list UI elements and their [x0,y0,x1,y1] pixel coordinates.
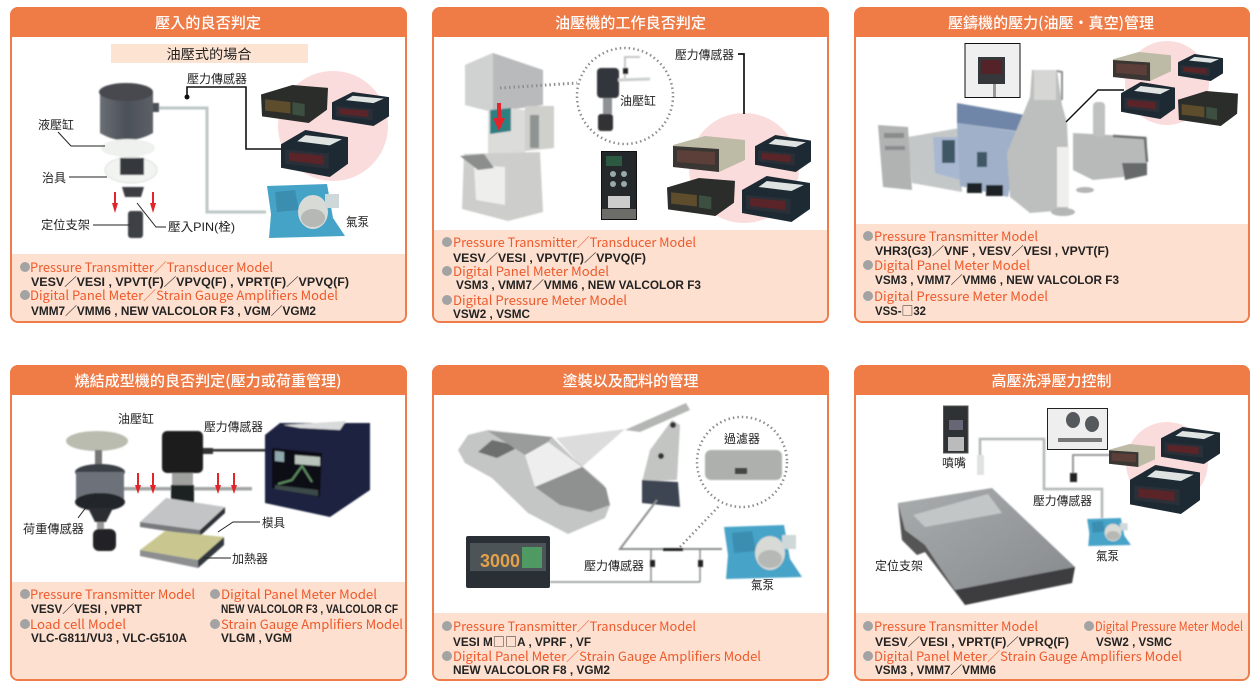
panel 2 diagram [460,47,811,223]
panel 1 header [10,7,407,37]
panel 1 diagram: 定位支架 [41,217,90,232]
inset pressure meter [965,44,1020,98]
die casting machine [878,70,1147,216]
panel 4 diagram: 模具 [262,516,285,530]
panel 1 model list: VESV／VESI , VPVT(F)／VPVQ(F) , VPRT(F)／VPVQ(F) [31,276,349,289]
panel 1 model list: VMM7／VMM6 , NEW VALCOLOR F3 , VGM／VGM2 [31,305,316,318]
panel 5 model list: Pressure Transmitter／Transducer Model [453,616,696,635]
panel 4 diagram: 油壓缸 [118,411,154,426]
panel 1 diagram: 壓力傳感器 [187,71,247,86]
red arrows [135,473,237,494]
panel 6 header: 高壓洗淨壓力控制 [992,370,1112,391]
panel 4 diagram: 加熱器 [232,552,268,566]
panel 6 model list: Pressure Transmitter Model [874,616,1038,635]
panel 2 diagram: 壓力傳感器 [675,47,734,62]
panel 5 model list: NEW VALCOLOR F8 , VGM2 [453,665,610,677]
panel 5 header [432,365,829,395]
panel 4 model list: Digital Panel Meter Model [221,584,377,603]
load cell assembly [66,431,128,551]
panel 5 header: 塗裝以及配料的管理 [562,370,698,391]
tray [898,488,1075,605]
panel 4 header: 燒結成型機的良否判定(壓力或荷重管理) [74,370,342,391]
panel 1 model list [12,254,405,321]
panel 1 model list: Digital Panel Meter／Strain Gauge Amplifiers Model [30,285,338,304]
panel 2 header [432,7,829,37]
panel 5 model list [434,613,827,679]
panel 2 model list: VESV／VESI , VPVT(F)／VPVQ(F) [453,252,646,265]
panel 2 model list: Pressure Transmitter／Transducer Model [453,232,696,251]
magnifier with filter [680,417,787,547]
panel 1 diagram: 治具 [42,171,66,185]
panel: sintering press quality judgement [10,365,407,680]
panel 4 model list: Strain Gauge Amplifiers Model [221,614,403,633]
panel 2 model list: VSW2 , VSMC [453,309,530,321]
panel 1 subtitle: 油壓式的場合 [166,47,252,62]
panel 2 model list: Digital Panel Meter Model [453,261,609,280]
nozzle control box [944,406,968,453]
panel 6 diagram: 氣泵 [1096,549,1119,563]
panel 3 diagram [878,41,1238,216]
panel 2 model list [434,230,827,321]
panel 2 header: 油壓機的工作良否判定 [555,12,706,33]
mould plates [140,498,225,568]
panel 5 diagram: 氣泵 [751,578,774,592]
panel 1 model list: Pressure Transmitter／Transducer Model [30,257,273,276]
spray cone [556,429,625,467]
panel 2 model list: VSM3 , VMM7／VMM6 , NEW VALCOLOR F3 [456,279,701,292]
panel 6 diagram: 定位支架 [875,558,923,573]
panel 4 header [10,365,407,395]
hydraulic cylinder [162,431,265,517]
panel 5 diagram: 過濾器 [724,431,760,446]
panel 6 model list: VSM3 , VMM7／VMM6 [875,664,996,677]
panel 4 diagram [23,411,370,568]
panel 4 model list: VLGM , VGM [221,633,292,645]
panel 3 header [854,7,1250,37]
pump [267,184,345,238]
panel 1 subtitle [111,44,308,63]
red arrow [493,103,505,131]
panel 3 model list: Digital Pressure Meter Model [874,286,1048,305]
panel 4 model list: Pressure Transmitter Model [30,584,195,603]
pump [724,525,802,579]
panel 4 model list: NEW VALCOLOR F3 , VALCOLOR CF [221,604,398,616]
panel 6 model list: Digital Panel Meter／Strain Gauge Amplifiers Model [874,646,1182,665]
panel 4 model list: VLC-G811/VU3 , VLC-G510A [31,633,187,645]
panel 1 diagram: 液壓缸 [38,117,74,132]
inset sensors [1048,408,1108,450]
panel 3 model list: Pressure Transmitter Model [874,226,1038,245]
panel: die casting pressure management [854,7,1250,322]
panel 2 diagram: 油壓缸 [620,93,656,108]
panel 6 diagram: 壓力傳感器 [1033,493,1092,508]
meters [261,85,389,177]
panel 5 diagram: 壓力傳感器 [584,558,644,573]
panel 4 model list [12,582,405,679]
meters [1113,52,1238,126]
panel 3 model list [856,224,1248,321]
panel 3 header: 壓鑄機的壓力(油壓・真空)管理 [948,12,1154,33]
panel: press-fit quality judgement [10,7,407,322]
red arrows [112,192,156,213]
panel 3 model list: VHR3(G3)／VNF , VESV／VESI , VPVT(F) [875,245,1109,258]
digital meter: 3000 [480,551,520,571]
panel 1 diagram: 氣泵 [346,215,369,229]
panel 6 model list: VESV／VESI , VPRT(F)／VPRQ(F) [875,636,1069,649]
panel 1 header: 壓入的良否判定 [155,12,261,33]
pump [1087,518,1131,546]
panel 5 diagram [458,403,802,592]
panel 4 model list: VESV／VESI , VPRT [31,603,142,616]
panel: painting and mixing management [432,365,829,680]
panel 6 diagram [875,406,1220,605]
control box [602,152,636,220]
magnifier with cylinder [500,48,673,144]
robot arm [625,403,690,507]
panel: hydraulic press work quality judgement [432,7,829,322]
panel 5 model list: Digital Panel Meter／Strain Gauge Amplifiers Model [453,646,761,665]
panel: high pressure washing control [854,365,1250,680]
digital meter [466,536,550,588]
controller [265,421,370,517]
panel 3 model list: Digital Panel Meter Model [874,255,1030,274]
panel 2 model list: Digital Pressure Meter Model [453,290,627,309]
panel 1 diagram [38,71,389,238]
panel 6 model list [856,613,1248,679]
panel 4 diagram: 壓力傳感器 [204,419,263,434]
panel 3 model list: VSS-□32 [875,302,926,319]
car body [458,430,610,534]
panel 6 header [854,365,1250,395]
panel 3 model list: VSM3 , VMM7／VMM6 , NEW VALCOLOR F3 [875,274,1119,287]
panel 1 diagram: 壓入PIN(栓) [168,219,235,234]
panel 4 model list: Load cell Model [30,614,126,633]
panel 4 diagram: 荷重傳感器 [23,521,84,536]
panel 6 diagram: 噴嘴 [942,456,966,470]
panel 6 model list: VSW2 , VSMC [1096,637,1172,649]
meters [1109,427,1220,514]
panel 5 model list: VESI M□□A , VPRF , VF [453,633,591,650]
meters [667,135,811,222]
